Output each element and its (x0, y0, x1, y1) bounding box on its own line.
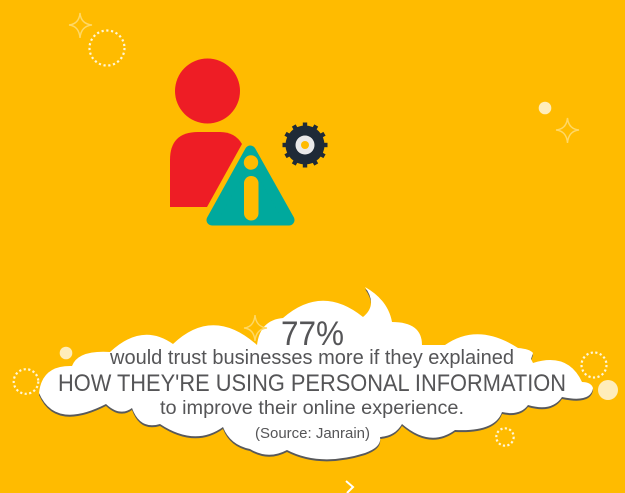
sparkle: top right (556, 118, 579, 143)
text: source: (Source: Janrain) (255, 425, 370, 442)
icon: person head (175, 58, 240, 124)
speech cloud (39, 287, 593, 461)
dotted circle: below cloud (496, 428, 514, 446)
text: closing line: to improve their online experience. (160, 398, 464, 419)
sparkle: top left (69, 13, 92, 38)
dot: left of cloud (60, 347, 72, 359)
dotted circle: top left (90, 30, 124, 66)
icon: person body (170, 132, 242, 207)
sparkle: on cloud (244, 315, 267, 341)
dotted circle: left of cloud (14, 369, 38, 394)
dot: right of cloud (598, 380, 618, 400)
icon: gear (282, 122, 328, 168)
dotted circle: right of cloud (582, 352, 606, 378)
icon: warning bar (244, 176, 258, 220)
statistic: 77%: 77% (281, 315, 344, 353)
arrow: next chevron (346, 481, 353, 493)
icon: person with warning sign (170, 58, 289, 220)
text: lead line: would trust businesses more if they explained (109, 347, 514, 369)
text: emphasis line: HOW THEY'RE USING PERSONAL INFORMATION (58, 370, 566, 397)
icon: warning triangle (212, 151, 289, 220)
icon: warning dot (244, 155, 258, 170)
dot: top right (539, 102, 551, 114)
